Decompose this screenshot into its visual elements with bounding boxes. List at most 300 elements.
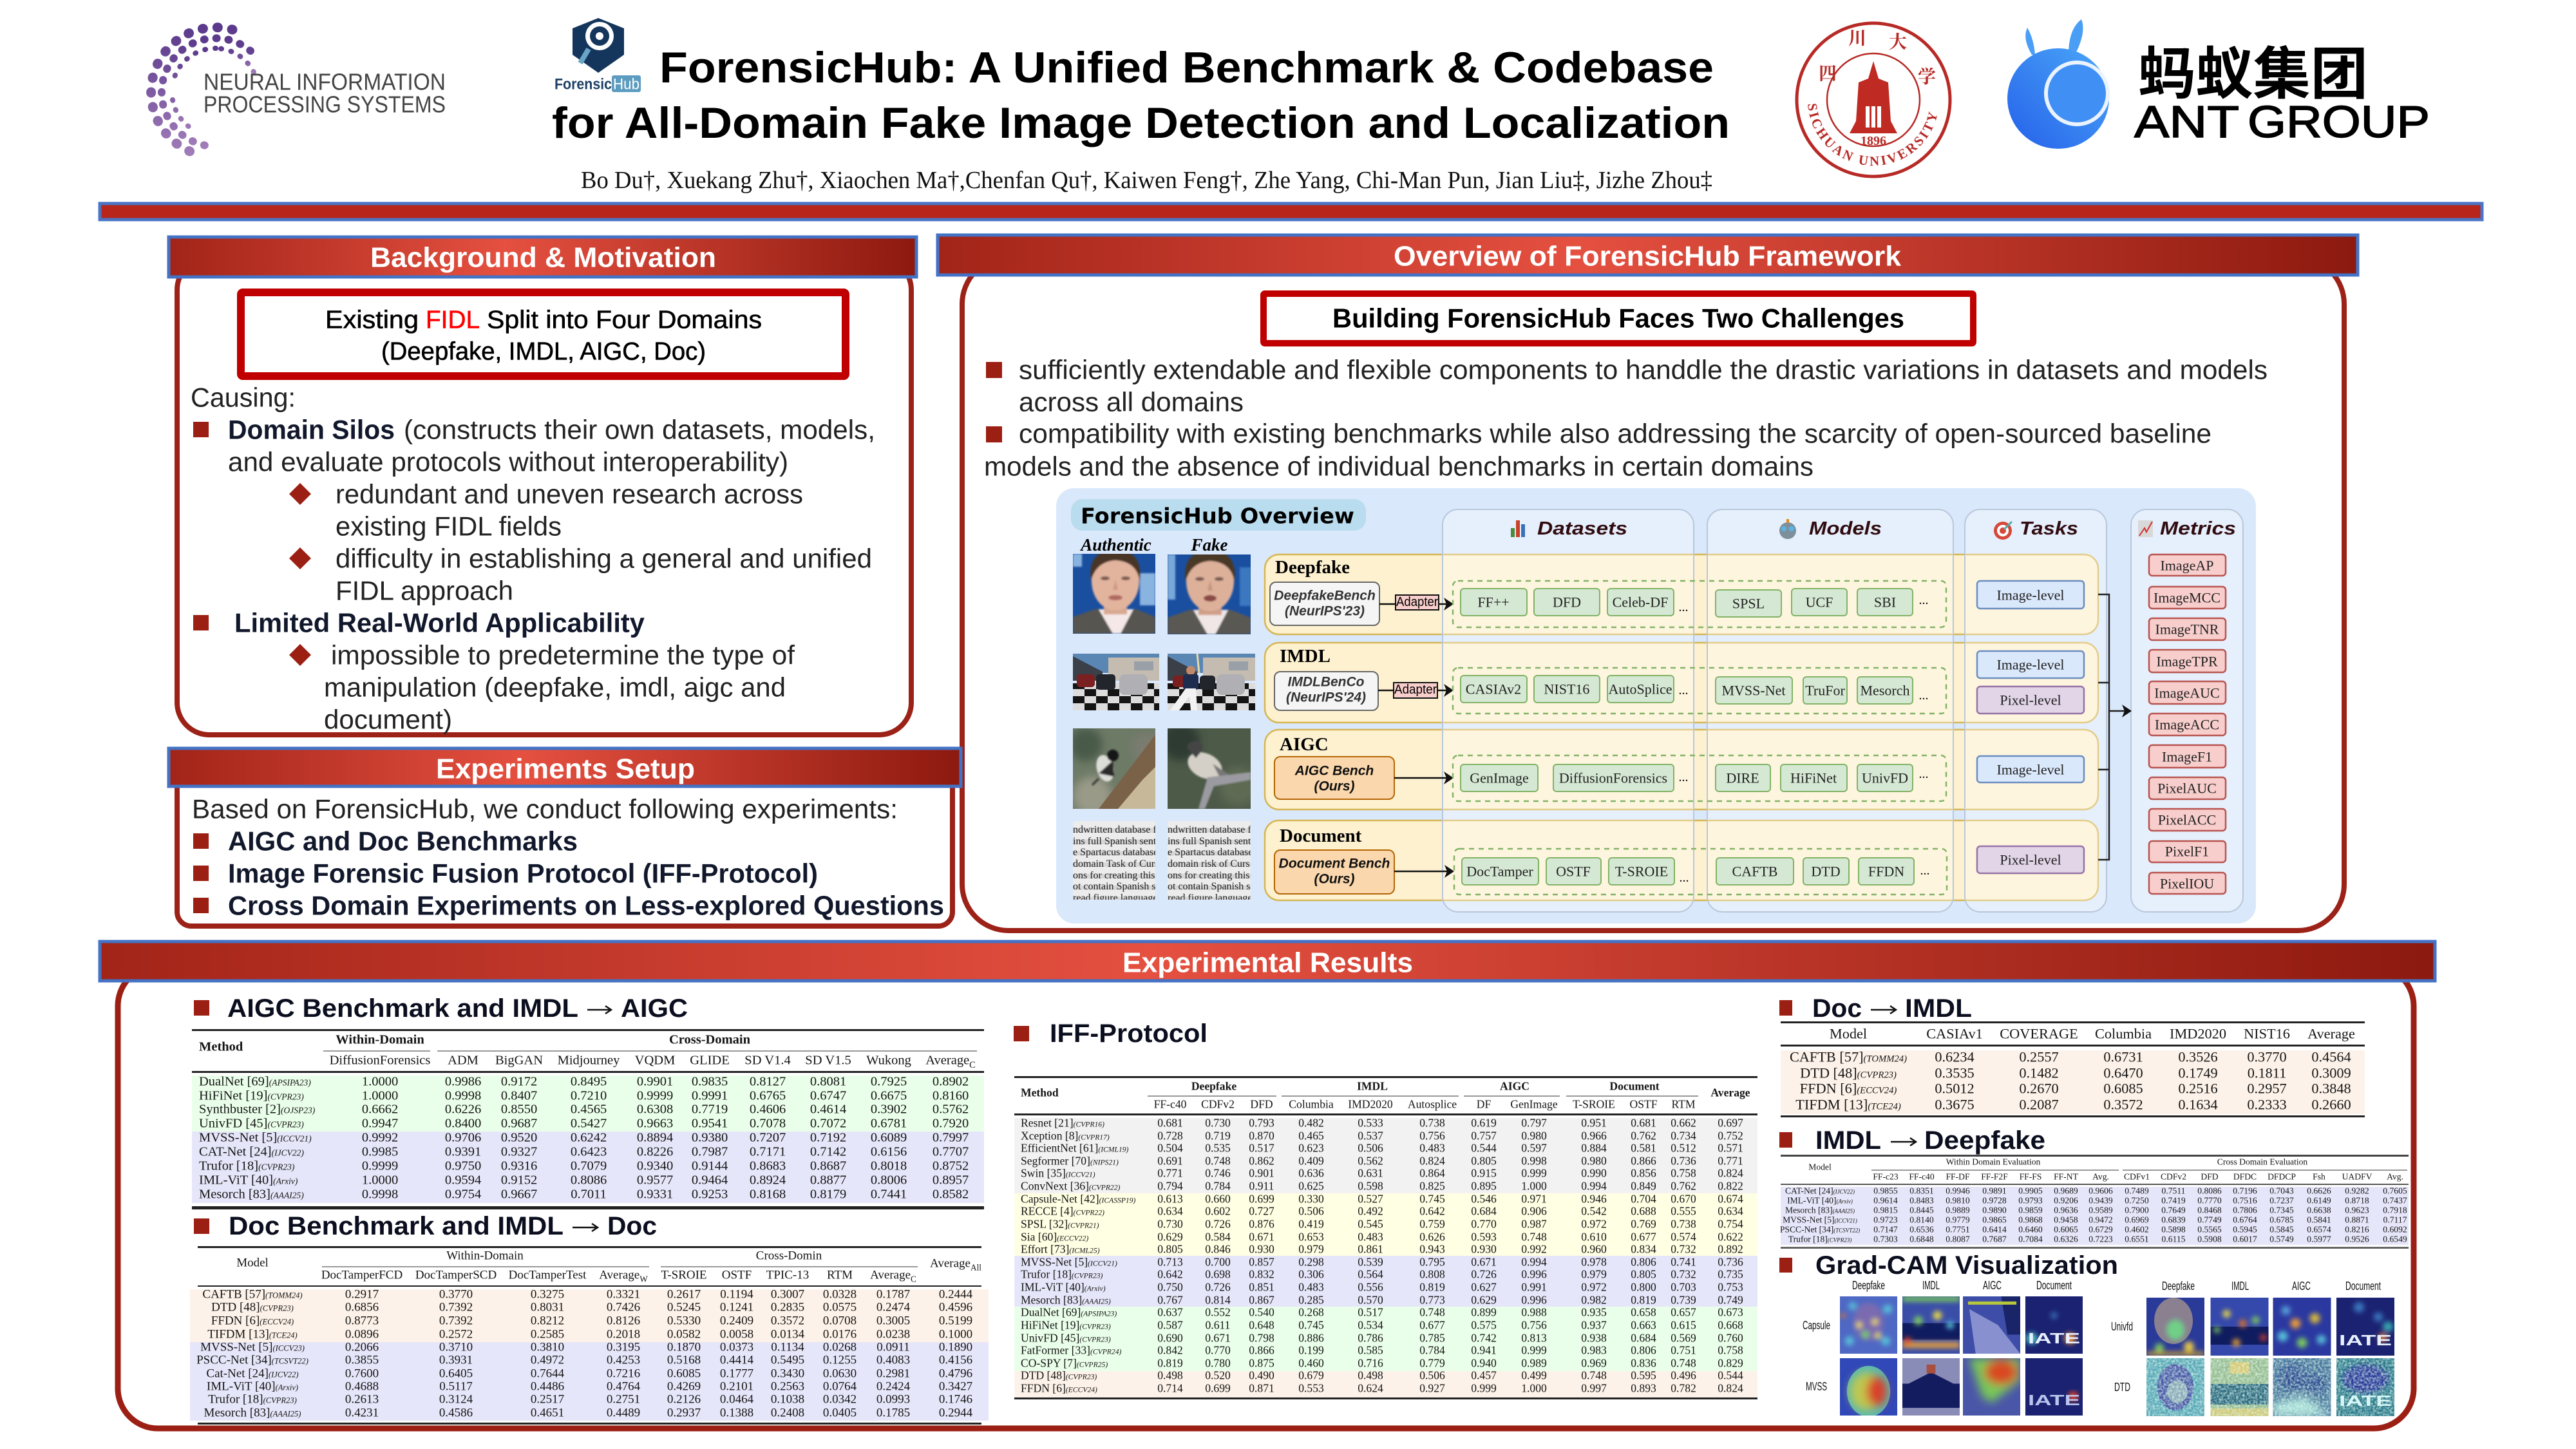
table: AIGC benchmark: 0.8127 — [750, 1075, 786, 1089]
table: AIGC benchmark: 0.7920 — [933, 1117, 969, 1131]
table: IMDL to deepfake: CDFv2 — [2161, 1172, 2186, 1182]
table: doc benchmark: PSCC-Net [34](TCSVT22) — [196, 1354, 308, 1367]
table: IFF-Protocol: 0.770 — [1471, 1217, 1497, 1230]
table: doc to IMDL: 0.1634 — [2178, 1097, 2218, 1113]
table: AIGC benchmark: 0.9754 — [445, 1188, 481, 1202]
arrow: tasks to metrics — [2098, 594, 2132, 860]
text: challenges list: compatibility with existing benchmarks while also addressing the scarcity of open-sourced baseline — [1019, 419, 2211, 448]
table: IFF-Protocol: 0.806 — [1631, 1343, 1656, 1356]
heading: IFF-Protocol: IFF-Protocol — [1050, 1019, 1208, 1048]
table: doc benchmark: 0.3855 — [345, 1354, 379, 1367]
heading: doc benchmark — [194, 1212, 657, 1240]
table: doc benchmark: 0.1255 — [823, 1354, 857, 1367]
table: IFF-Protocol: DualNet [69](APSIPA23) — [1021, 1305, 1117, 1318]
table: IFF-Protocol: 1.000 — [1521, 1179, 1547, 1192]
table: IMDL to deepfake: 0.6065 — [2054, 1225, 2078, 1235]
table: IFF-Protocol: 0.671 — [1205, 1331, 1231, 1344]
table: doc benchmark: 0.8031 — [531, 1301, 564, 1314]
table: IFF-Protocol: 0.941 — [1471, 1343, 1497, 1356]
table: IMDL to deepfake: 0.5845 — [2269, 1225, 2294, 1235]
table: IFF-Protocol: 0.946 — [1581, 1192, 1607, 1205]
table: doc benchmark: 0.7600 — [345, 1367, 379, 1381]
table: IMDL to deepfake: 0.9810 — [1946, 1196, 1970, 1206]
table: IFF-Protocol: RTM — [1671, 1097, 1696, 1110]
table: IMDL to deepfake: Trufor [18](CVPR23) — [1788, 1235, 1852, 1244]
table: IMDL to deepfake: 0.6551 — [2125, 1235, 2149, 1244]
table: IFF-Protocol: IMDL — [1357, 1079, 1388, 1092]
table: IMDL to deepfake: 0.7918 — [2383, 1206, 2407, 1215]
table: IFF-Protocol: 0.631 — [1358, 1166, 1383, 1179]
table: IFF-Protocol: 0.671 — [1471, 1255, 1497, 1268]
table: doc benchmark: OSTF — [722, 1269, 752, 1282]
table: IFF-Protocol: 0.786 — [1358, 1331, 1383, 1344]
table: IFF-Protocol: 0.587 — [1157, 1318, 1183, 1331]
table: AIGC benchmark: VQDM — [635, 1054, 675, 1068]
table: doc to IMDL: 0.2670 — [2019, 1081, 2059, 1097]
row: AIGC: ... — [1919, 767, 1928, 781]
table: IFF-Protocol: 0.570 — [1358, 1293, 1383, 1306]
table: IMDL to deepfake: 0.7511 — [2162, 1186, 2185, 1196]
row: IMDL: ... — [1678, 683, 1689, 697]
table: IFF-Protocol: 0.754 — [1718, 1217, 1743, 1230]
table: doc benchmark: 0.0342 — [823, 1393, 857, 1406]
text: causes list: redundant and uneven research across — [336, 479, 803, 509]
row: AIGC: AIGC — [1280, 734, 1329, 755]
table: AIGC benchmark: 0.8902 — [933, 1075, 969, 1089]
table: IFF-Protocol: 0.482 — [1298, 1116, 1324, 1129]
table: AIGC benchmark: 0.9986 — [445, 1075, 481, 1089]
table: IFF-Protocol: 0.805 — [1631, 1267, 1656, 1280]
table: IFF-Protocol: 0.819 — [1157, 1356, 1183, 1369]
table: doc to IMDL: 0.3848 — [2311, 1081, 2351, 1097]
image: fake document: ndwritten database fo — [1168, 824, 1256, 835]
table: IFF-Protocol: 0.610 — [1581, 1230, 1607, 1243]
table: IFF-Protocol: 0.306 — [1298, 1267, 1324, 1280]
row: document: OSTF — [1556, 863, 1591, 880]
table: doc benchmark: 0.6085 — [667, 1367, 701, 1381]
table: doc benchmark: Cross-Domin — [756, 1249, 822, 1263]
row: document: ... — [1680, 871, 1689, 885]
table: doc benchmark: 0.7644 — [531, 1367, 564, 1381]
callout: two challenges: Building ForensicHub Faces Two Challenges — [1332, 303, 1904, 334]
table: doc benchmark: 0.7426 — [607, 1301, 640, 1314]
table: IFF-Protocol: 0.545 — [1358, 1217, 1383, 1230]
table: IMDL to deepfake: 0.8086 — [2197, 1186, 2222, 1196]
table: doc to IMDL: COVERAGE — [2000, 1026, 2078, 1042]
row: AIGC: ... — [1678, 770, 1689, 784]
table: IFF-Protocol: 0.714 — [1157, 1381, 1183, 1394]
table: doc benchmark: 0.7216 — [607, 1367, 640, 1381]
table: IFF-Protocol: 0.506 — [1358, 1141, 1383, 1154]
table: AIGC benchmark: 0.7925 — [871, 1075, 907, 1089]
table: IFF-Protocol: 0.691 — [1157, 1154, 1183, 1167]
table: IFF-Protocol: Average — [1710, 1086, 1750, 1099]
table: IFF-Protocol: 0.800 — [1631, 1280, 1656, 1293]
table: IFF-Protocol: 0.997 — [1581, 1381, 1607, 1394]
table: doc to IMDL: IMD2020 — [2170, 1026, 2226, 1042]
table: IFF-Protocol: 0.805 — [1471, 1154, 1497, 1167]
table: IFF-Protocol: 0.492 — [1358, 1204, 1383, 1217]
table: IMDL to deepfake: Model — [1808, 1162, 1832, 1172]
table: doc benchmark: 0.4156 — [939, 1354, 972, 1367]
panel: experiments setup: Image Forensic Fusion Protocol (IFF-Protocol) — [228, 858, 818, 889]
heatmap: dtd deepfake — [2146, 1358, 2204, 1416]
table: doc benchmark: 0.1241 — [720, 1301, 753, 1314]
table: AIGC benchmark: 0.8752 — [933, 1159, 969, 1173]
table: doc to IMDL: NIST16 — [2244, 1026, 2290, 1042]
table: IFF-Protocol: 0.836 — [1631, 1356, 1656, 1369]
table: doc benchmark: 0.2835 — [771, 1301, 804, 1314]
table: IFF-Protocol: 0.704 — [1631, 1192, 1656, 1205]
table: AIGC benchmark: Within-Domain — [336, 1033, 424, 1047]
table: AIGC benchmark: 0.9327 — [501, 1145, 537, 1159]
metrics list: PixelAUC — [2157, 781, 2217, 796]
metrics list: ImageMCC — [2154, 590, 2221, 605]
image: authentic document — [1073, 821, 1166, 904]
row: AIGC: Image-level — [1996, 761, 2065, 778]
table: AIGC benchmark: 1.0000 — [362, 1173, 398, 1188]
table: AIGC benchmark: 0.7192 — [810, 1131, 846, 1145]
table: IFF-Protocol: 0.728 — [1157, 1129, 1183, 1142]
image: authentic face — [1073, 554, 1155, 634]
table: IFF-Protocol: 0.534 — [1358, 1318, 1383, 1331]
table: doc to IMDL: CAFTB [57](TOMM24) — [1790, 1049, 1907, 1065]
image: fake document: e Spartacus database — [1168, 847, 1253, 858]
callout: four domains: Existing — [325, 307, 419, 334]
table: doc benchmark: 0.2409 — [720, 1314, 753, 1328]
table: IFF-Protocol: 0.681 — [1631, 1116, 1656, 1129]
table: IFF-Protocol: 0.629 — [1471, 1293, 1497, 1306]
table: IFF-Protocol: 0.498 — [1358, 1368, 1383, 1381]
table: doc benchmark: 0.3007 — [771, 1288, 804, 1302]
table: IFF-Protocol: Capsule-Net [42](ICASSP19) — [1021, 1192, 1135, 1205]
table: AIGC benchmark: MVSS-Net [5](ICCV21) — [199, 1131, 312, 1145]
table: IFF-Protocol: 0.713 — [1157, 1255, 1183, 1268]
table: AIGC benchmark: Midjourney — [558, 1054, 620, 1068]
row: IMDL: AutoSplice — [1609, 681, 1672, 697]
table: IFF-Protocol: 0.533 — [1358, 1116, 1383, 1129]
row: document: DocTamper — [1466, 863, 1533, 880]
table: IMDL to deepfake: 0.9439 — [2088, 1196, 2113, 1206]
table: doc benchmark: RTM — [827, 1269, 853, 1282]
table: IMDL to deepfake: 0.6115 — [2162, 1235, 2185, 1244]
heading: IMDL to deepfake: IMDL — [1815, 1126, 1881, 1155]
table: doc benchmark: 0.0405 — [823, 1406, 857, 1420]
table: IMDL to deepfake: FF-NT — [2054, 1172, 2078, 1182]
table: IFF-Protocol: 0.770 — [1205, 1343, 1231, 1356]
table: IFF-Protocol: 0.688 — [1631, 1204, 1656, 1217]
diagram: ForensicHub overview — [1056, 488, 2256, 923]
metrics list — [2149, 554, 2226, 894]
table: IFF-Protocol: 0.506 — [1298, 1204, 1324, 1217]
table: IMDL to deepfake: 0.7223 — [2088, 1235, 2113, 1244]
row: IMDL: ... — [1919, 688, 1928, 703]
table: AIGC benchmark: Method — [199, 1040, 243, 1054]
table: AIGC benchmark: 0.7719 — [692, 1103, 728, 1117]
table: doc benchmark: 0.3005 — [876, 1314, 910, 1328]
row: deepfake: DeepfakeBench — [1274, 589, 1376, 603]
table: AIGC benchmark: 0.8877 — [810, 1173, 846, 1188]
labels: authentic and fake: Authentic — [1079, 535, 1151, 554]
table: IFF-Protocol: 0.886 — [1298, 1331, 1324, 1344]
table: IFF-Protocol: 0.899 — [1471, 1305, 1497, 1318]
image: fake car scene with player — [1168, 654, 1255, 710]
row: deepfake: Deepfake — [1275, 557, 1350, 578]
table: IFF-Protocol: 0.268 — [1298, 1305, 1324, 1318]
table: doc benchmark: 0.0058 — [720, 1328, 753, 1341]
table: IFF-Protocol: 0.930 — [1249, 1242, 1274, 1255]
column: models — [1707, 509, 1953, 912]
table: IMDL to deepfake: 0.7516 — [2233, 1196, 2257, 1206]
table: IFF-Protocol: 0.699 — [1205, 1381, 1231, 1394]
table: doc to IMDL: 0.3526 — [2178, 1049, 2218, 1065]
table: IFF-Protocol: CO-SPY [7](CVPR25) — [1021, 1356, 1108, 1369]
heatmap: capsule aigc — [1963, 1296, 2020, 1354]
table: AIGC benchmark: 0.7207 — [750, 1131, 786, 1145]
table: doc benchmark: AverageC — [870, 1269, 916, 1283]
table: IFF-Protocol: Sia [60](ECCV22) — [1021, 1230, 1088, 1243]
column labels: Univfd — [2111, 1320, 2133, 1333]
logo: Ant Group: ANT — [2134, 97, 2239, 147]
callout: four domains: (Deepfake, IMDL, AIGC, Doc) — [381, 337, 706, 366]
table: IFF-Protocol: 1.000 — [1521, 1381, 1547, 1394]
table: IFF-Protocol: 0.999 — [1521, 1166, 1547, 1179]
table: IMDL to deepfake: 0.6839 — [2161, 1215, 2186, 1225]
metrics list: PixelIOU — [2160, 876, 2214, 891]
table: IMDL to deepfake: 0.8351 — [1909, 1186, 1934, 1196]
table: IFF-Protocol: 0.684 — [1631, 1331, 1656, 1344]
table: IFF-Protocol: 0.798 — [1249, 1331, 1274, 1344]
table: IFF-Protocol: 0.677 — [1419, 1318, 1445, 1331]
table: IMDL to deepfake: CAT-Net [24](IJCV22) — [1785, 1186, 1855, 1196]
heading: Grad-CAM: Grad-CAM Visualization — [1815, 1251, 2118, 1280]
table: IMDL to deepfake: 0.9855 — [1873, 1186, 1898, 1196]
table: doc benchmark: 0.5330 — [667, 1314, 701, 1328]
table: IMDL to deepfake: 0.9890 — [1982, 1206, 2007, 1215]
table: IFF-Protocol: DTD [48](CVPR23) — [1021, 1368, 1097, 1381]
table: IMDL to deepfake: 0.9905 — [2018, 1186, 2043, 1196]
heatmap: dtd imdl — [2210, 1358, 2268, 1416]
table: IMDL to deepfake: 0.6729 — [2088, 1225, 2113, 1235]
row: IMDL: IMDL — [1280, 646, 1331, 667]
table: AIGC benchmark: BigGAN — [495, 1054, 543, 1068]
table: AIGC benchmark: 0.8683 — [750, 1159, 786, 1173]
table: IFF-Protocol: 0.496 — [1671, 1368, 1696, 1381]
table: AIGC benchmark: UnivFD [45](CVPR23) — [199, 1117, 304, 1131]
table: doc benchmark: 0.1388 — [720, 1406, 753, 1420]
table: IMDL to deepfake: 0.8871 — [2345, 1215, 2369, 1225]
table: IFF-Protocol: 0.642 — [1419, 1204, 1445, 1217]
row: IMDL: NIST16 — [1544, 681, 1589, 697]
logo: ForensicHub shield: Forensic — [554, 76, 612, 93]
table: IFF-Protocol: 0.757 — [1471, 1129, 1497, 1142]
logo: ForensicHub shield: Hub — [613, 76, 639, 93]
table: doc benchmark: 0.6856 — [345, 1301, 379, 1314]
table: doc benchmark: 0.4269 — [667, 1380, 701, 1394]
table: IFF-Protocol: 0.627 — [1471, 1280, 1497, 1293]
table: IMDL to deepfake: 0.5945 — [2233, 1225, 2257, 1235]
text: causes list: Limited Real-World Applicability — [234, 608, 645, 638]
table: AIGC benchmark: 0.9541 — [692, 1117, 728, 1131]
table: doc benchmark: 0.4414 — [720, 1354, 753, 1367]
table: IMDL to deepfake: 0.7605 — [2383, 1186, 2407, 1196]
table: IFF-Protocol: 0.748 — [1419, 1305, 1445, 1318]
row: deepfake: Adapter — [1396, 595, 1438, 609]
table: IFF-Protocol: 0.824 — [1718, 1166, 1743, 1179]
table: AIGC benchmark: 0.8687 — [810, 1159, 846, 1173]
table: IFF-Protocol: 0.892 — [1718, 1242, 1743, 1255]
heading: AIGC benchmark: AIGC Benchmark and IMDL — [227, 994, 578, 1023]
table: IFF-Protocol: CDFv2 — [1201, 1097, 1235, 1110]
table: IFF-Protocol: 0.971 — [1521, 1192, 1547, 1205]
table: IFF-Protocol: 0.822 — [1718, 1179, 1743, 1192]
row: deepfake: (NeurIPS'23) — [1285, 604, 1365, 618]
row: IMDL: CASIAv2 — [1466, 681, 1521, 697]
row bands — [1265, 554, 2098, 900]
logo: Sichuan University: 川 — [1848, 28, 1866, 49]
row: deepfake: FF++ — [1477, 594, 1510, 611]
table: IFF-Protocol: 0.871 — [1249, 1381, 1274, 1394]
table: IMDL to deepfake: 0.9859 — [2018, 1206, 2043, 1215]
table: AIGC benchmark: 0.9998 — [362, 1188, 398, 1202]
row: document — [1274, 826, 2084, 895]
table: IFF-Protocol: 0.849 — [1631, 1179, 1656, 1192]
table: AIGC benchmark: 0.8924 — [750, 1173, 786, 1188]
heatmap: mvss aigc — [1963, 1358, 2020, 1416]
panel: experiments setup — [177, 773, 952, 926]
table: IFF-Protocol: 0.915 — [1471, 1166, 1497, 1179]
table: doc benchmark: 0.5199 — [939, 1314, 972, 1328]
table: IFF-Protocol: 0.653 — [1298, 1230, 1324, 1243]
table: IFF-Protocol: 0.834 — [1631, 1242, 1656, 1255]
table: AIGC benchmark: Cross-Domain — [669, 1033, 750, 1047]
table: IFF-Protocol: 0.857 — [1249, 1255, 1274, 1268]
table: IFF-Protocol: UnivFD [45](CVPR23) — [1021, 1331, 1111, 1344]
table: IMDL to deepfake: 0.7084 — [2018, 1235, 2043, 1244]
table: IFF-Protocol: 0.648 — [1249, 1318, 1274, 1331]
table: doc to IMDL: Columbia — [2095, 1026, 2152, 1042]
table: doc benchmark: 0.2751 — [607, 1393, 640, 1406]
table: doc benchmark: 0.7392 — [439, 1301, 473, 1314]
row: IMDL: Adapter — [1394, 683, 1437, 697]
heading: background and motivation — [169, 237, 916, 277]
table: IFF-Protocol: 0.752 — [1718, 1129, 1743, 1142]
table: doc benchmark: Mesorch [83](AAAI25) — [204, 1406, 301, 1420]
table: doc to IMDL: 0.6234 — [1935, 1049, 1975, 1065]
table: AIGC benchmark: 0.4614 — [810, 1103, 846, 1117]
table: AIGC benchmark: 0.7142 — [810, 1145, 846, 1159]
table: IFF-Protocol: IMD2020 — [1348, 1097, 1393, 1110]
table: doc benchmark: 0.2408 — [771, 1406, 804, 1420]
heatmap: mvss deepfake — [1840, 1358, 1897, 1416]
logo: NeurIPS: NEURAL INFORMATION — [204, 68, 446, 95]
heatmap: mvss document: IATE — [2028, 1392, 2080, 1408]
table: IMDL to deepfake: 0.6969 — [2125, 1215, 2149, 1225]
table: IFF-Protocol: 0.623 — [1298, 1141, 1324, 1154]
row: AIGC: UnivFD — [1862, 770, 1908, 786]
heading: AIGC benchmark — [194, 994, 688, 1023]
image: authentic document: domain Task of Curs — [1073, 858, 1159, 869]
table: IFF-Protocol: OSTF — [1629, 1097, 1658, 1110]
table: doc benchmark: 0.4253 — [607, 1354, 640, 1367]
table: IFF-Protocol: 0.537 — [1358, 1129, 1383, 1142]
table: IFF-Protocol: DFD — [1250, 1097, 1273, 1110]
table: IFF-Protocol: 0.498 — [1157, 1368, 1183, 1381]
table: IFF-Protocol: 0.716 — [1358, 1356, 1383, 1369]
table: AIGC benchmark: 0.8018 — [871, 1159, 907, 1173]
table: AIGC benchmark: 1.0000 — [362, 1089, 398, 1103]
table: IFF-Protocol: 0.506 — [1419, 1368, 1445, 1381]
table: doc to IMDL: 0.1482 — [2019, 1065, 2059, 1081]
table: AIGC benchmark: HiFiNet [19](CVPR23) — [199, 1089, 304, 1103]
table: doc benchmark: 0.4083 — [876, 1354, 910, 1367]
table: IFF-Protocol: 0.943 — [1419, 1242, 1445, 1255]
table: doc benchmark: 0.2101 — [720, 1380, 753, 1394]
table: AIGC benchmark: 0.9577 — [637, 1173, 673, 1188]
table: IFF-Protocol: ConvNext [36](CVPR22) — [1021, 1179, 1120, 1192]
table: IFF-Protocol: 0.842 — [1157, 1343, 1183, 1356]
table: IFF-Protocol: 0.504 — [1157, 1141, 1183, 1154]
table: IMDL to deepfake: Avg. — [2092, 1172, 2109, 1182]
image: fake document — [1168, 821, 1260, 904]
column labels: Deepfake — [2162, 1280, 2195, 1293]
table: IMDL to deepfake: 0.6149 — [2307, 1196, 2331, 1206]
table: IFF-Protocol: 0.668 — [1718, 1318, 1743, 1331]
table: AIGC benchmark: 0.8179 — [810, 1188, 846, 1202]
heading: doc to IMDL: Doc — [1812, 994, 1862, 1023]
table: AIGC benchmark: Wukong — [866, 1054, 911, 1068]
table: AIGC benchmark: 0.8495 — [571, 1075, 607, 1089]
table: IFF-Protocol: 0.748 — [1205, 1154, 1231, 1167]
table: doc benchmark: 0.2944 — [939, 1406, 972, 1420]
table: IMDL to deepfake: 0.9865 — [1982, 1215, 2007, 1225]
table: IFF-Protocol: 0.966 — [1581, 1129, 1607, 1142]
table: doc benchmark: 0.2917 — [345, 1288, 379, 1302]
table: AIGC benchmark: 0.7987 — [692, 1145, 728, 1159]
table: IFF-Protocol: 0.539 — [1358, 1255, 1383, 1268]
table: IFF-Protocol: FatFormer [33](CVPR24) — [1021, 1343, 1121, 1356]
row: deepfake: ... — [1919, 593, 1928, 607]
table: IFF-Protocol: 0.637 — [1157, 1305, 1183, 1318]
table: doc benchmark: Trufor [18](CVPR23) — [208, 1393, 297, 1406]
table: doc benchmark: 0.0373 — [720, 1341, 753, 1354]
logo: Sichuan University: 1896 — [1861, 134, 1886, 148]
table: IFF-Protocol: 0.991 — [1521, 1280, 1547, 1293]
table: IFF-Protocol: 0.753 — [1718, 1280, 1743, 1293]
heatmap: dtd aigc — [2273, 1358, 2331, 1416]
table: IMDL to deepfake: 0.8087 — [1946, 1235, 1970, 1244]
table: IMDL to deepfake: 0.5749 — [2269, 1235, 2294, 1244]
table: IFF-Protocol: 0.739 — [1671, 1293, 1696, 1306]
table: IFF-Protocol: T-SROIE — [1573, 1097, 1615, 1110]
image: fake document: ons for creating this c — [1168, 870, 1257, 881]
text: challenges list: sufficiently extendable and flexible components to handdle the drastic variations in datasets and models — [1019, 354, 2268, 385]
table: AIGC benchmark: 0.6242 — [571, 1131, 607, 1145]
heatmap: dtd document — [2336, 1358, 2394, 1416]
table: doc to IMDL: 0.3535 — [1935, 1065, 1975, 1081]
table: doc benchmark: 0.6405 — [439, 1367, 473, 1381]
table: IFF-Protocol: 0.552 — [1205, 1305, 1231, 1318]
table: AIGC benchmark: SD V1.5 — [805, 1054, 851, 1068]
table: IFF-Protocol: 0.730 — [1157, 1217, 1183, 1230]
table: IMDL to deepfake: 0.6638 — [2307, 1206, 2331, 1215]
table: doc benchmark: 0.4486 — [531, 1380, 564, 1394]
table: IMDL to deepfake: 0.7900 — [2125, 1206, 2149, 1215]
table: IFF-Protocol: 0.556 — [1358, 1280, 1383, 1293]
table: IMDL to deepfake: 0.9723 — [1873, 1215, 1898, 1225]
table: doc benchmark: 0.0464 — [720, 1393, 753, 1406]
column labels: DTD — [2114, 1381, 2130, 1394]
